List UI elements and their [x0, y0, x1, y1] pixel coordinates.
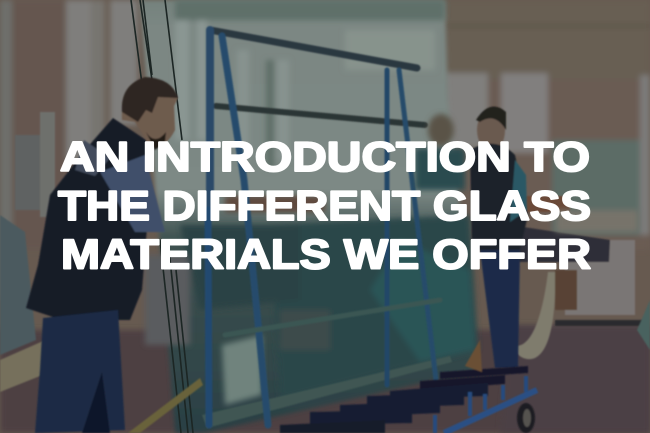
thin glass edges: [131, 0, 193, 433]
blue rack frame: [208, 30, 440, 425]
left stacked glass: [0, 112, 55, 392]
title: MATERIALS WE OFFER: [61, 230, 591, 278]
machine right: [510, 225, 650, 359]
floor yellow line: [128, 378, 203, 433]
title: [58, 133, 591, 278]
second man behind the glass: [415, 114, 465, 190]
large glass pane: [140, 0, 478, 433]
title: THE DIFFERENT GLASS: [58, 182, 591, 229]
man at left: [26, 77, 178, 433]
floor: [0, 330, 650, 433]
windows: [66, 0, 92, 160]
glass bottom edge: [202, 356, 452, 428]
orange strip: [520, 196, 570, 212]
cart: [280, 340, 537, 433]
right man in black shirt: [470, 107, 528, 368]
title: AN INTRODUCTION TO: [60, 133, 590, 180]
